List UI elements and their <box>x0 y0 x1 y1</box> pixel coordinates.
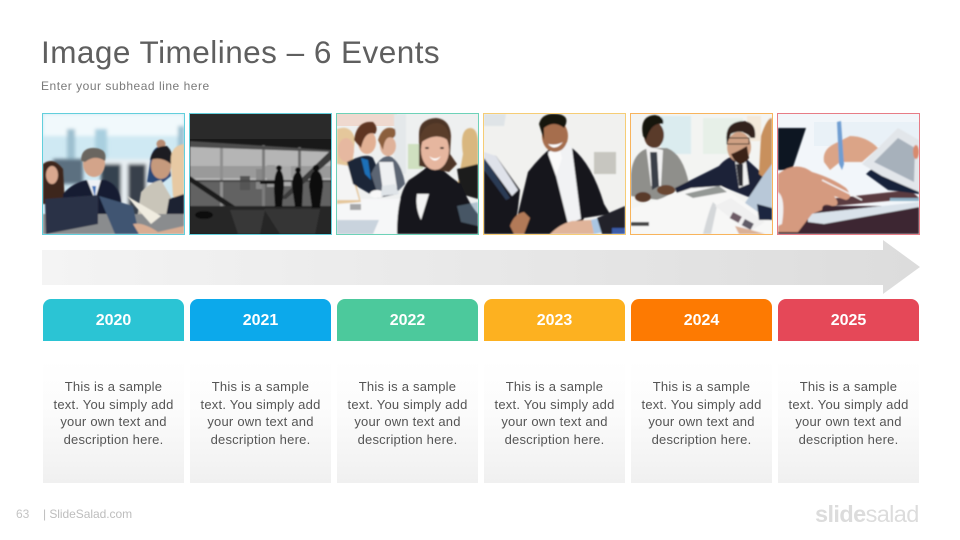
year tab: 2025: 2025 <box>831 312 866 329</box>
year tab: 2024: 2024 <box>684 312 719 329</box>
year tab: 2020: 2020 <box>96 312 131 329</box>
text card: 2021: text. You simply add <box>200 397 321 412</box>
text card: 2020: text. You simply add <box>53 397 174 412</box>
text card: 2023 <box>484 360 625 483</box>
year tab: 2023 <box>484 299 625 341</box>
text card: 2024: This is a sample <box>653 379 750 394</box>
text card: 2023: This is a sample <box>506 379 603 394</box>
year tab: 2020 <box>43 299 184 341</box>
photo: 2021 silhouettes at skyline window <box>189 113 332 235</box>
text card: 2022: your own text and <box>354 414 461 429</box>
year tab: 2022: 2022 <box>390 312 425 329</box>
text card: 2021 <box>190 360 331 483</box>
text card: 2025: text. You simply add <box>788 397 909 412</box>
text card: 2024: your own text and <box>648 414 755 429</box>
text card: 2022: This is a sample <box>359 379 456 394</box>
year tab: 2021 <box>190 299 331 341</box>
photo: 2023 businesswoman handshake <box>483 113 626 235</box>
footer site name: | SlideSalad.com <box>43 507 132 521</box>
text card: 2020: This is a sample <box>65 379 162 394</box>
text card: 2021: your own text and <box>207 414 314 429</box>
text card: 2023: your own text and <box>501 414 608 429</box>
text card: 2023: text. You simply add <box>494 397 615 412</box>
photo: 2024 colleagues at meeting table <box>630 113 773 235</box>
text card: 2025 <box>778 360 919 483</box>
text card: 2021: description here. <box>211 432 310 447</box>
text card: 2023: description here. <box>505 432 604 447</box>
subhead: Enter your subhead line here <box>41 79 210 93</box>
logo: slidesalad wordmark: slidesalad <box>815 501 919 527</box>
text card: 2024: description here. <box>652 432 751 447</box>
text card: 2021: This is a sample <box>212 379 309 394</box>
photo: 2022 smiling businesswoman <box>336 113 479 235</box>
text card: 2020 <box>43 360 184 483</box>
photo: 2025 hands with pen and document <box>777 113 920 235</box>
text card: 2025: description here. <box>799 432 898 447</box>
text card: 2022 <box>337 360 478 483</box>
page number: 63 <box>16 507 29 521</box>
text card: 2022: description here. <box>358 432 457 447</box>
text card: 2025: your own text and <box>795 414 902 429</box>
year tab: 2025 <box>778 299 919 341</box>
timeline arrow <box>42 240 920 294</box>
photo: 2020 team around laptops <box>42 113 185 235</box>
text card: 2024: text. You simply add <box>641 397 762 412</box>
year tab: 2024 <box>631 299 772 341</box>
title: Image Timelines – 6 Events <box>41 34 440 70</box>
year tab: 2023: 2023 <box>537 312 572 329</box>
text card: 2022: text. You simply add <box>347 397 468 412</box>
text card: 2020: description here. <box>64 432 163 447</box>
text card: 2024 <box>631 360 772 483</box>
year tab: 2022 <box>337 299 478 341</box>
text card: 2020: your own text and <box>60 414 167 429</box>
year tab: 2021: 2021 <box>243 312 278 329</box>
text card: 2025: This is a sample <box>800 379 897 394</box>
